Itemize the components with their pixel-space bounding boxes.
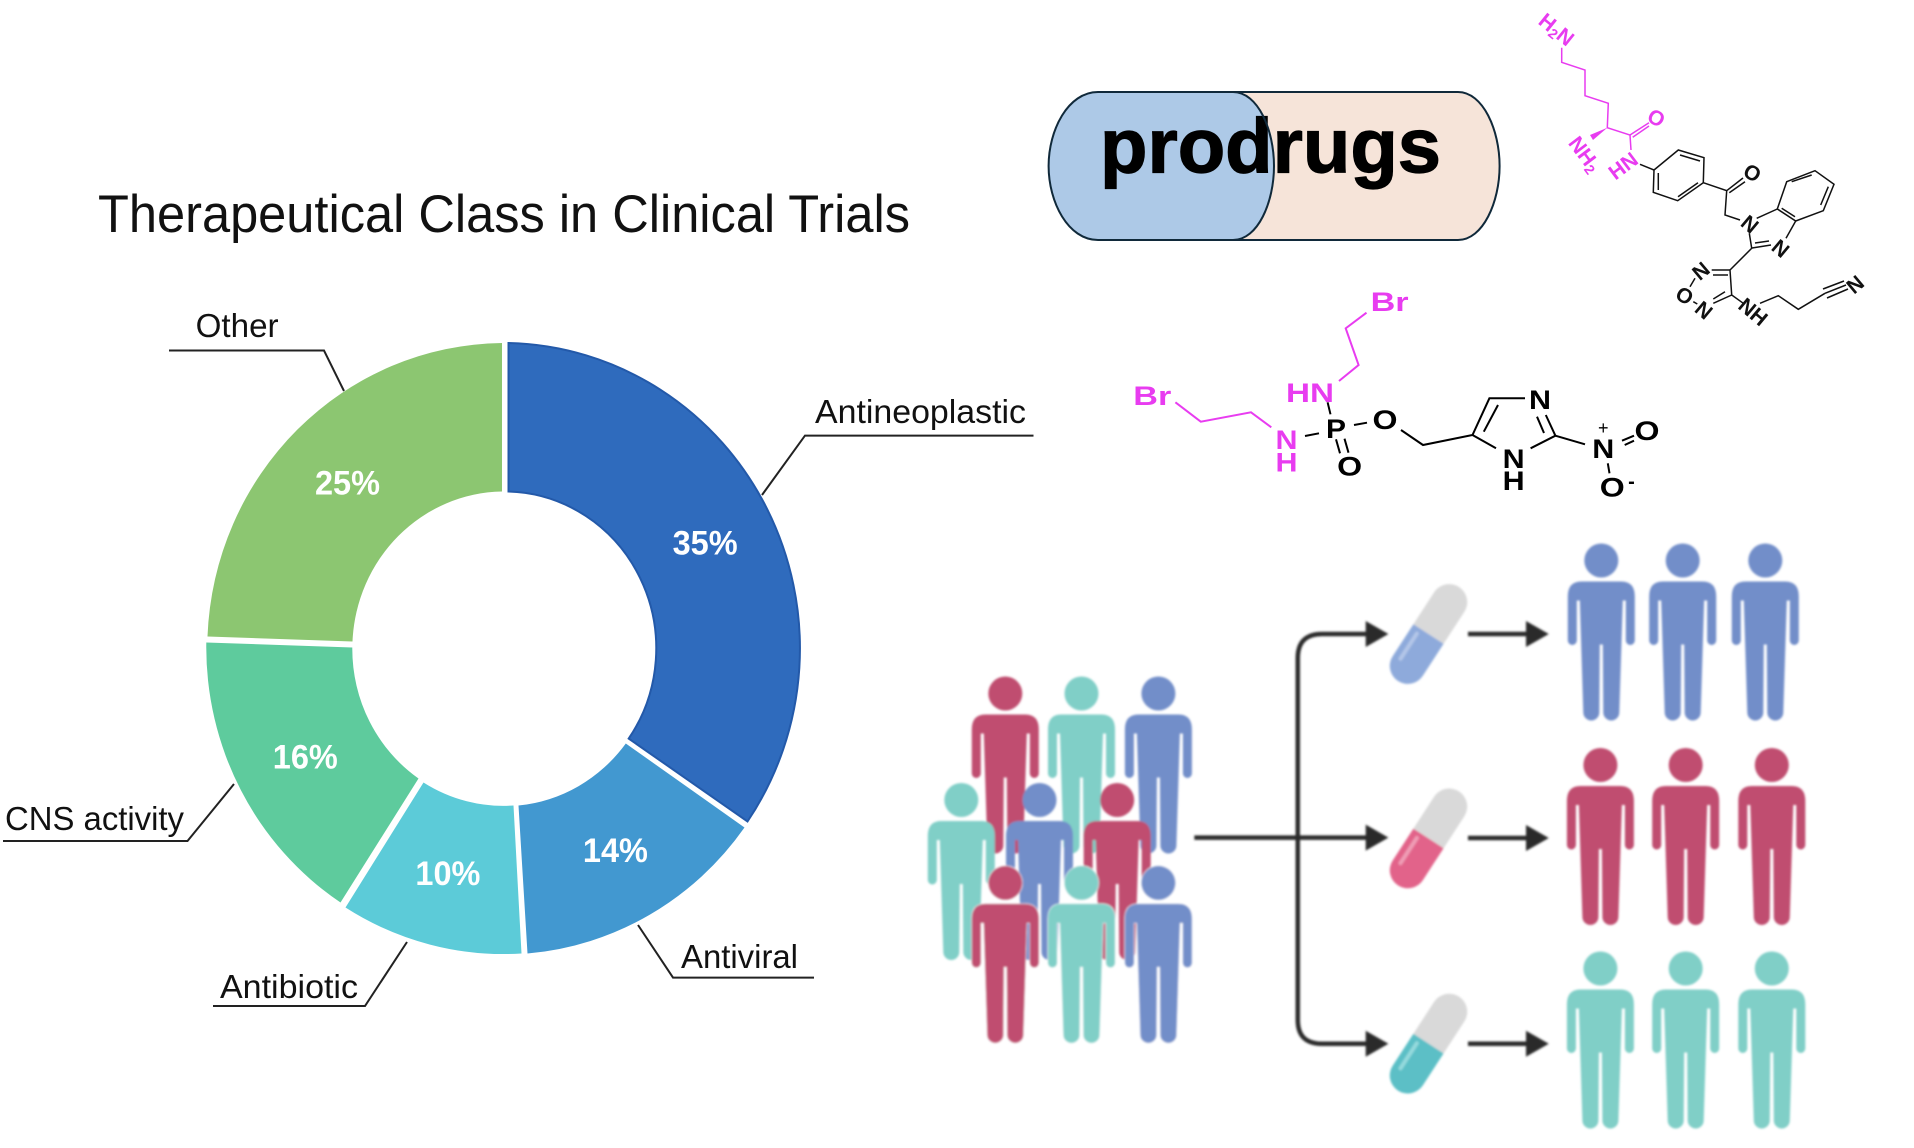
bromoethyl arms in magenta: HN (1286, 378, 1334, 408)
drug scaffold in black: N (1690, 297, 1717, 324)
promoiety in magenta: 2 (1581, 161, 1599, 178)
drug scaffold in black: N (1842, 271, 1869, 299)
phosphoramidate and nitroimidazole in black: + (1598, 418, 1609, 438)
phosphoramidate and nitroimidazole in black: P (1326, 414, 1346, 444)
responder group: red (1567, 748, 1805, 925)
bromoethyl arms in magenta: Br (1371, 287, 1409, 317)
label: Antiviral: Antiviral (681, 938, 798, 975)
percent: 10%: 10% (415, 855, 480, 893)
molecule: lower structure (1133, 287, 1660, 502)
drug scaffold in black: NH (1734, 294, 1772, 331)
promoiety in magenta: N (1552, 24, 1578, 51)
bromoethyl arms in magenta: N (1276, 425, 1298, 455)
slice: CNS activity 16% (206, 642, 418, 902)
phosphoramidate and nitroimidazole in black: O (1634, 416, 1660, 446)
title: Therapeutical Class in Clinical Trials (98, 185, 910, 244)
drug scaffold in black (1640, 150, 1869, 331)
bromoethyl arms in magenta (1133, 287, 1409, 478)
label: Other: Other (196, 307, 279, 344)
promoiety in magenta (1533, 9, 1669, 185)
capsule right half (1233, 92, 1500, 240)
promoiety in magenta: HN (1605, 148, 1643, 185)
percent: 14%: 14% (583, 832, 648, 870)
mixed patient crowd (928, 676, 1192, 1043)
phosphoramidate and nitroimidazole in black: N (1503, 444, 1525, 474)
label: Antineoplastic (762, 393, 1034, 495)
donut chart (206, 343, 800, 954)
phosphoramidate and nitroimidazole in black: N (1592, 434, 1614, 464)
capsule left half (1049, 92, 1274, 240)
responder group: blue (1568, 544, 1799, 720)
drug scaffold in black: N (1767, 235, 1793, 263)
phosphoramidate and nitroimidazole in black (1305, 385, 1660, 502)
phosphoramidate and nitroimidazole in black: O (1600, 472, 1625, 502)
word: prodrugs: prodrugs (1100, 104, 1441, 190)
percent: 35%: 35% (673, 524, 738, 562)
label: Antibiotic: Antibiotic (220, 968, 358, 1005)
phosphoramidate and nitroimidazole in black: O (1372, 405, 1398, 435)
capsule: red (1383, 782, 1474, 895)
label: Antiviral (638, 925, 814, 978)
slice: Antibiotic 10% (346, 782, 522, 954)
bromoethyl arms in magenta: H (1276, 448, 1298, 478)
molecule: upper structure (1533, 9, 1869, 331)
responder group: teal (1567, 952, 1805, 1128)
drug scaffold in black: O (1671, 282, 1697, 310)
drug scaffold in black: O (1739, 160, 1765, 188)
slice: Antineoplastic 35% (508, 343, 800, 822)
phosphoramidate and nitroimidazole in black: O (1337, 452, 1362, 482)
promoiety in magenta: 2 (1545, 25, 1561, 42)
drug scaffold in black: N (1688, 258, 1715, 285)
patient stratification diagram (928, 544, 1805, 1128)
branching arrows (1194, 621, 1549, 1057)
capsule: teal (1383, 987, 1474, 1100)
phosphoramidate and nitroimidazole in black: H (1503, 466, 1525, 496)
slice: Other 25% (208, 343, 502, 642)
slice: Antiviral 14% (518, 744, 744, 954)
label: CNS activity (3, 784, 234, 841)
bromoethyl arms in magenta: Br (1133, 381, 1172, 411)
phosphoramidate and nitroimidazole in black: - (1628, 471, 1635, 493)
phosphoramidate and nitroimidazole in black: N (1529, 385, 1551, 415)
prodrugs capsule (1049, 92, 1500, 240)
label: Other (169, 307, 344, 391)
capsule: blue (1383, 577, 1474, 691)
promoiety in magenta: NH (1564, 132, 1600, 171)
label: CNS activity: CNS activity (5, 800, 184, 837)
promoiety in magenta: O (1643, 105, 1669, 133)
drug scaffold in black: N (1736, 211, 1763, 238)
percent: 16%: 16% (273, 738, 338, 776)
label: Antibiotic (213, 942, 407, 1006)
label: Antineoplastic: Antineoplastic (815, 393, 1026, 430)
percent: 25%: 25% (315, 464, 380, 502)
promoiety in magenta: H (1534, 9, 1560, 37)
